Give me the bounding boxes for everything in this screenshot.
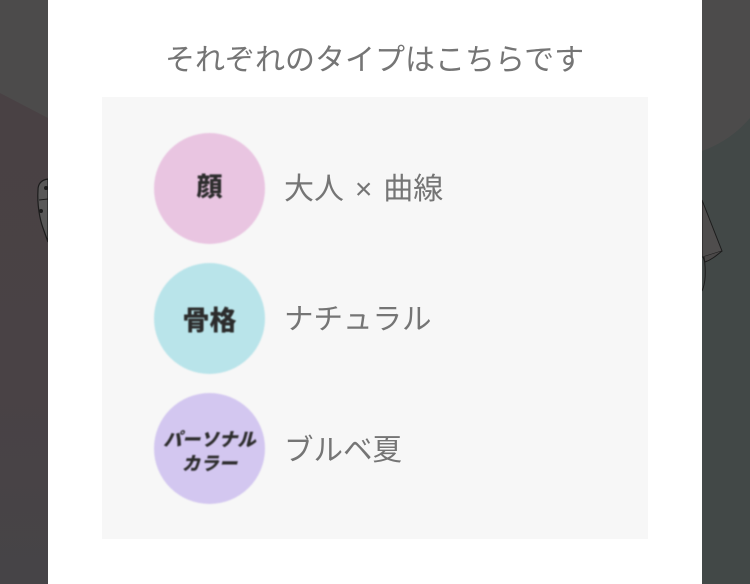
badge: personal color xyxy=(154,393,265,504)
type: skeleton: ナチュラル xyxy=(284,303,432,336)
type: face: 大人 × 曲線 xyxy=(284,173,443,206)
grey results panel xyxy=(102,97,648,539)
badge: skeleton xyxy=(154,263,265,374)
badge: personal color: カラー xyxy=(182,453,237,474)
badge: face: 顔 xyxy=(196,172,222,202)
badge: personal color: パーソナル xyxy=(163,429,256,450)
type: personal color: ブルベ夏 xyxy=(284,434,402,467)
heading: それぞれのタイプはこちらです xyxy=(165,44,584,77)
badge: face xyxy=(154,133,265,244)
badge: skeleton: 骨格 xyxy=(182,306,236,336)
